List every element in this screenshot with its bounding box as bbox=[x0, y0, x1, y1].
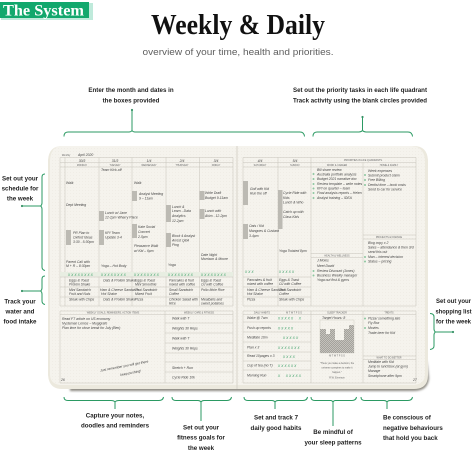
weekly schedule: right page: Pizza bbox=[247, 298, 255, 302]
callout: water and food: food intake bbox=[3, 318, 37, 326]
food log: left page: sweet potatoes bbox=[201, 302, 224, 306]
weekly schedule: left page: Analyst Meeting bbox=[138, 192, 163, 196]
priorities: work and career: Budget 2021 narrative doc bbox=[317, 177, 357, 181]
habits panel: Meditate 10m bbox=[247, 336, 268, 340]
fitness goals panel: Walk with T bbox=[172, 336, 190, 340]
priorities: work and career: Final analysis reports – Helen bbox=[317, 191, 362, 195]
weekly schedule: right page bbox=[243, 181, 311, 302]
weekly schedule: left page: Oxford Ideas bbox=[73, 236, 93, 240]
food log: left page: Eggs & Toast bbox=[135, 278, 156, 282]
food log: left page: Oats & Protein Shake bbox=[103, 298, 136, 302]
notes panel: Plan time for close break for July (Ben) bbox=[62, 326, 120, 330]
callout: sleep: Be mindful of bbox=[313, 429, 354, 436]
weekly schedule: left page: Pleasance Walk bbox=[134, 244, 159, 248]
tag: The System: The System bbox=[3, 2, 85, 20]
weekly schedule: right page: 3-4pm bbox=[249, 234, 259, 238]
priorities: work and career bbox=[312, 168, 363, 200]
food log: left page: Rice bbox=[169, 302, 176, 306]
weekly schedule: left page: Team Kick-off bbox=[101, 168, 123, 172]
fitness goals panel: WEEKLY CARE & FITNESS bbox=[184, 312, 214, 314]
weekly schedule: left page: Arrest Q&A bbox=[171, 238, 190, 242]
callout: water and food bbox=[3, 276, 45, 326]
callout: month and dates bbox=[64, 87, 304, 136]
weekly schedule: left page: Concert bbox=[138, 230, 151, 234]
food log: left page: Protein Shake bbox=[69, 282, 90, 286]
callout: habits: daily good habits bbox=[251, 425, 302, 432]
negative behaviours panel: Meditate with Kid bbox=[368, 360, 394, 364]
callout: shopping list: shopping list bbox=[436, 308, 472, 316]
weekly schedule: right page: xxx bbox=[244, 269, 255, 274]
habits panel: xxxxxx bbox=[277, 363, 297, 368]
fitness goals panel: Cycle Ride 10k bbox=[172, 376, 195, 380]
priorities: home and family: Dentist time – book costs bbox=[368, 183, 406, 187]
callout: sleep bbox=[304, 397, 362, 446]
water tracker: left page: xxxxxxxx bbox=[133, 272, 160, 277]
priorities: home and family: Free Billing bbox=[368, 178, 385, 182]
fitness goals panel: Walk with T bbox=[172, 316, 190, 320]
food log: left page: Mixed Fruit bbox=[135, 292, 153, 296]
left page header: 1/4 bbox=[147, 159, 151, 163]
right page bbox=[237, 146, 425, 385]
weekly schedule: right page: Catch up with bbox=[283, 210, 304, 214]
food log: left page: Oats & Protein Shake bbox=[103, 278, 136, 282]
fitness goals panel: Weights 30 Reps bbox=[172, 326, 198, 330]
priorities: health and wellness: HEALTH & WELLNESS bbox=[324, 254, 350, 258]
priorities: projects and finance: Man – interest decision bbox=[368, 255, 403, 259]
right page header: WORK & CAREER bbox=[327, 164, 347, 167]
food log: left page: Small Sandwich bbox=[169, 288, 193, 292]
weekly schedule: right page: Steak with Chips bbox=[279, 298, 305, 302]
book cover bbox=[48, 146, 428, 389]
callout: shopping list: Set out your bbox=[436, 298, 472, 305]
weekly schedule: left page: Budget 9-11am bbox=[205, 196, 228, 200]
water tracker: left page: xxxxxxxx bbox=[67, 272, 94, 277]
callout: habits: Set and track 7 bbox=[254, 414, 299, 422]
habits panel: xxxx bbox=[282, 354, 296, 359]
food log: left page: Fruit and Nuts bbox=[69, 292, 91, 296]
habits panel bbox=[243, 311, 416, 383]
handwritten note: keep pushing! bbox=[120, 369, 141, 377]
priorities: work and career: Analyst training – IDEA bbox=[316, 196, 353, 200]
food log: left page: Hot Shake bbox=[101, 292, 117, 296]
weekly schedule: right page: Oats / Kid bbox=[249, 224, 264, 228]
weekly schedule: left page: Update 3-4 bbox=[105, 236, 122, 240]
sleep tracker chart: Target Hours: 8 bbox=[322, 316, 345, 320]
food log: left page bbox=[60, 277, 233, 306]
notes panel: WEEKLY GOALS, REMINDERS, ACTION ITEMS bbox=[87, 312, 140, 314]
weekly schedule: left page: KPI Team bbox=[105, 231, 120, 235]
habits panel: Morning Run bbox=[247, 374, 267, 378]
priorities: health and wellness: Review Discount (Jones) bbox=[317, 269, 354, 273]
water tracker: left page: xxxxxxxx bbox=[100, 272, 127, 277]
weekly schedule: left page: Dept Meeting bbox=[66, 203, 86, 207]
weekly schedule: left page: Ping bbox=[172, 243, 179, 247]
notes panel: 26 bbox=[60, 378, 65, 382]
priorities: home and family bbox=[364, 169, 406, 192]
right page header: PRIORITIES IN LIFE QUADRANTS bbox=[344, 159, 382, 162]
food log: left page: Coffee bbox=[169, 292, 179, 296]
weekly schedule: left page: Learn - Data bbox=[172, 209, 191, 213]
weekly schedule: right page: Yoga Twisted 8pm bbox=[279, 249, 307, 253]
priorities: health and wellness: Meet David bbox=[317, 264, 334, 268]
callout: sleep: your sleep patterns bbox=[304, 440, 362, 446]
weekly schedule: right page: Thai Sandwich bbox=[279, 288, 301, 292]
habits panel: DAILY HABITS bbox=[254, 312, 270, 314]
priorities: work and career: Australia portfolio analysis bbox=[316, 172, 357, 176]
weekly schedule: right page: Coffee bbox=[279, 292, 289, 296]
food log: left page: Thai Sandwich bbox=[135, 288, 157, 292]
callout: schedule: the week bbox=[7, 196, 34, 202]
weekly schedule: left page: 12-2pm Wharry Place bbox=[105, 216, 138, 220]
right page header: HOME & FAMILY bbox=[380, 164, 399, 167]
sleep tracker chart: SLEEP TRACKER bbox=[327, 312, 347, 314]
weekly schedule: left page: Block 4 Analyst bbox=[172, 234, 196, 238]
callout: priority tasks: Set out the priority tasks in each life quadrant bbox=[293, 87, 427, 94]
left page header: THURSDAY bbox=[176, 164, 189, 167]
callout: negative behaviours: negative behaviours bbox=[383, 425, 443, 432]
food log: left page: Eggs & Toast bbox=[201, 278, 222, 282]
callout: schedule bbox=[2, 174, 45, 270]
left page header: TUESDAY bbox=[109, 164, 121, 167]
weekly schedule: right page: Golf with Kid bbox=[250, 187, 269, 191]
priorities: work and career: KPI on quarter – team bbox=[317, 186, 350, 190]
negative behaviours panel: Trade beer for Kid bbox=[368, 331, 395, 335]
food log: left page: Chicken Salad with bbox=[169, 298, 198, 302]
food log: left page: OJ with Coffee bbox=[201, 282, 223, 286]
callout: month and dates: Enter the month and dates in bbox=[88, 87, 174, 94]
left page header: April 2020 bbox=[77, 153, 93, 157]
left page header: WEDNESDAY bbox=[141, 164, 157, 167]
left page header: 31/3 bbox=[112, 159, 118, 163]
right page header: 4/4 bbox=[258, 159, 262, 163]
priorities: projects and finance: Status – pricing bbox=[368, 260, 391, 264]
left page header bbox=[60, 153, 233, 306]
book shadow bbox=[70, 360, 429, 391]
callout: negative behaviours: that hold you back bbox=[383, 435, 438, 442]
weekly schedule: right page: Lunch & Who bbox=[283, 200, 303, 204]
weekly schedule: right page: Mangoes & Custard bbox=[249, 229, 279, 233]
weekly schedule: left page: PR Plan to bbox=[73, 231, 89, 235]
weekly schedule: left page: Date Night bbox=[201, 253, 218, 257]
priorities: health and wellness: Yoga out first & gyms bbox=[317, 278, 349, 282]
weekly schedule: left page: Kate Social bbox=[138, 225, 155, 229]
habits panel: Push up reports bbox=[247, 326, 271, 330]
habits panel: Cup of tea (no T) bbox=[247, 364, 273, 368]
habits panel: xxxxx x bbox=[277, 316, 302, 320]
water tracker: left page bbox=[60, 272, 233, 277]
left page header: MONDAY bbox=[77, 164, 88, 167]
weekly schedule: left page: Yoga – Hot Body bbox=[101, 264, 127, 268]
callout: month and dates: the boxes provided bbox=[103, 98, 160, 104]
callout: notes: doodles and reminders bbox=[81, 422, 150, 430]
right page header: SUNDAY bbox=[290, 164, 300, 167]
priorities: projects and finance bbox=[363, 235, 416, 264]
callout: fitness: Set out your bbox=[183, 424, 220, 432]
habits panel: xxxxxxx bbox=[277, 345, 301, 350]
fitness goals panel bbox=[165, 312, 233, 380]
callout: priority tasks: Track activity using the blank circles provided bbox=[293, 98, 427, 104]
priorities: projects and finance: send this out bbox=[368, 250, 388, 254]
right page header bbox=[243, 158, 416, 306]
negative behaviours panel: TREATS bbox=[384, 312, 394, 314]
habits panel: xxxxx bbox=[277, 326, 294, 330]
callout: negative behaviours bbox=[361, 397, 443, 442]
negative behaviours panel: WHAT TO DO BETTER bbox=[376, 356, 402, 360]
food log: left page: mixed with coffee bbox=[169, 282, 195, 286]
weekly schedule: left page: Morrison & Moore bbox=[201, 257, 228, 261]
sleep tracker chart: "There you make a decision, the bbox=[320, 362, 355, 365]
food log: left page: Eggs & Toast bbox=[69, 278, 90, 282]
weekly schedule: right page: Kids bbox=[283, 196, 290, 200]
negative behaviours panel: Movies bbox=[368, 326, 379, 330]
negative behaviours panel: Smartphone after 9pm bbox=[368, 374, 402, 378]
habits panel: x xxxxx bbox=[277, 373, 302, 378]
left page header: 3/4 bbox=[214, 159, 218, 163]
food log: left page: Steak with Chips bbox=[69, 298, 95, 302]
weekly schedule: left page: Akim - 12-2pm bbox=[204, 214, 227, 218]
handwritten note bbox=[99, 359, 150, 381]
priorities: home and family: Submit product claim bbox=[368, 174, 400, 178]
callout: schedule: Set out your bbox=[2, 176, 39, 182]
callout: fitness bbox=[172, 397, 232, 451]
left page header: 30/3 bbox=[79, 159, 85, 163]
callout: water and food: Track your bbox=[4, 298, 36, 306]
weekly schedule: left page: w/ Kid – 6pm bbox=[134, 249, 154, 253]
weekly schedule: left page: Yoga bbox=[168, 263, 176, 267]
sleep tracker chart: M T W T F S S bbox=[329, 354, 345, 358]
weekly schedule: right page: Cycle Ride with bbox=[283, 191, 306, 195]
food log: left page: Mini Sandwich bbox=[69, 288, 91, 292]
food log: left page: Pancakes & fruit bbox=[169, 278, 195, 282]
left page header: FRIDAY bbox=[212, 164, 221, 167]
weekly schedule: left page: Write Draft bbox=[205, 191, 222, 195]
weekly schedule: right page: Eggs & Toast bbox=[279, 278, 300, 282]
priorities: work and career: Bill share review bbox=[317, 168, 342, 172]
weekly schedule: right page: Pancakes & fruit bbox=[247, 278, 273, 282]
negative behaviours panel: 27 bbox=[412, 378, 417, 382]
left page header: Monthly bbox=[62, 154, 71, 157]
left page header: 2/4 bbox=[179, 159, 184, 163]
priorities: projects and finance: Sales – attendance & then 3rd bbox=[368, 246, 414, 250]
callout: fitness: fitness goals for bbox=[177, 434, 225, 442]
priorities: health and wellness: J Moles bbox=[316, 258, 329, 262]
weekly schedule: right page: Class Kids bbox=[283, 215, 299, 219]
sleep tracker chart: universe conspires to make it bbox=[322, 366, 353, 370]
right page header: 5/4 bbox=[293, 159, 297, 163]
weekly schedule: left page: Lunch & bbox=[172, 205, 185, 209]
water tracker: left page: xxxxxxxx bbox=[167, 272, 194, 277]
callout: schedule: schedule for bbox=[2, 186, 39, 192]
notebook bbox=[48, 146, 429, 391]
negative behaviours panel: Manage bbox=[368, 369, 380, 373]
callout: notes: Capture your notes, bbox=[86, 412, 145, 420]
callout: priority tasks bbox=[293, 87, 427, 136]
weekly schedule: left page: Walk bbox=[134, 181, 142, 185]
food log: left page: Pizza bbox=[135, 298, 143, 302]
weekly schedule: left page: Parent Call with bbox=[66, 260, 90, 264]
notes panel bbox=[60, 311, 233, 383]
weekly schedule: right page: mixed with coffee bbox=[247, 282, 273, 286]
notes panel: Nysteman Lemos – Mugigrafe bbox=[62, 322, 107, 326]
priorities: projects and finance: Blog copy x 2 bbox=[368, 241, 388, 245]
habits panel: Wake @ 7am bbox=[247, 316, 268, 320]
weekly schedule: left page: 9 – 11am bbox=[139, 196, 153, 200]
negative behaviours panel bbox=[363, 312, 417, 382]
callout: water and food: water and bbox=[5, 308, 35, 316]
weekly schedule: left page: 12-2pm bbox=[172, 219, 184, 223]
callout: habits bbox=[244, 397, 308, 432]
negative behaviours panel: Pizza/ something late bbox=[368, 316, 400, 320]
callout: negative behaviours: Be conscious of bbox=[383, 414, 432, 422]
sleep tracker chart: happen." bbox=[332, 371, 342, 374]
food log: left page: Meatballs and bbox=[201, 298, 222, 302]
left page bbox=[50, 146, 237, 385]
food log: left page: Ham & Cheese Sandwich bbox=[100, 288, 139, 292]
food log: left page: Mini Smoothie bbox=[135, 282, 157, 286]
callout: notes bbox=[64, 397, 164, 430]
callout: shopping list: for the week bbox=[436, 318, 472, 326]
notes panel: Read FT article on US economy bbox=[62, 317, 111, 321]
weekly schedule: right page: Run the off bbox=[250, 192, 268, 196]
habits panel: Plan x 3 bbox=[247, 346, 259, 350]
priorities: health and wellness bbox=[311, 254, 363, 282]
weekly schedule: left page: 3:30 - 5:30pm bbox=[73, 240, 94, 244]
handwritten note: Just remember you will get there bbox=[99, 359, 149, 373]
negative behaviours panel: Fly Box bbox=[368, 321, 380, 325]
weekly schedule: right page: Hot Shake bbox=[247, 292, 263, 296]
weekly schedule: right page: OJ with Coffee bbox=[279, 282, 301, 286]
fitness goals panel: Stretch + Run bbox=[172, 366, 193, 370]
weekly schedule: left page: Lunch w/ Jane bbox=[105, 211, 127, 215]
subtitle: overview of your time, health and priorities. bbox=[142, 47, 334, 58]
priorities: work and career: Review template – write notes bbox=[317, 182, 363, 186]
water tracker: left page: xxxxxxxx bbox=[200, 272, 227, 277]
habits panel: Read 10pages x 3 bbox=[247, 354, 275, 358]
weekly schedule: left page: Walk bbox=[66, 181, 74, 185]
weekly schedule: left page: Analytics bbox=[171, 214, 186, 218]
weekly schedule: left page: 2-5pm bbox=[137, 235, 148, 239]
weekly schedule: left page: Lunch with bbox=[205, 209, 221, 213]
sleep tracker chart: R.W. Emerson bbox=[329, 376, 345, 380]
habits panel: M T W T F S S bbox=[286, 312, 302, 314]
habits panel: xxxxx bbox=[282, 335, 299, 340]
fitness goals panel: Weights 30 Reps bbox=[172, 346, 198, 350]
priorities: home and family: Send to car for service bbox=[368, 188, 402, 192]
callout: shopping list bbox=[430, 298, 472, 350]
priorities: health and wellness: Business Weekly manager bbox=[317, 274, 358, 278]
priorities: projects and finance: PROJECTS & FINANCE bbox=[376, 236, 402, 239]
weekly schedule: right page: xxxxx bbox=[278, 269, 295, 274]
negative behaviours panel: Jump to lunchbox (at gym) bbox=[367, 364, 408, 368]
weekly schedule: right page: Ham & Cheese Sandwich bbox=[247, 288, 286, 292]
weekly schedule: left page bbox=[66, 168, 228, 268]
food log: left page: Pollo Mole Rice bbox=[201, 288, 225, 292]
spine bbox=[236, 146, 238, 389]
sleep tracker chart bbox=[320, 312, 355, 380]
priorities: home and family: Week expenses bbox=[368, 169, 392, 173]
right page header: SATURDAY bbox=[254, 164, 267, 167]
title: Weekly & Daily bbox=[151, 10, 325, 41]
weekly schedule: left page: M + R – 8:30pm bbox=[66, 264, 90, 268]
